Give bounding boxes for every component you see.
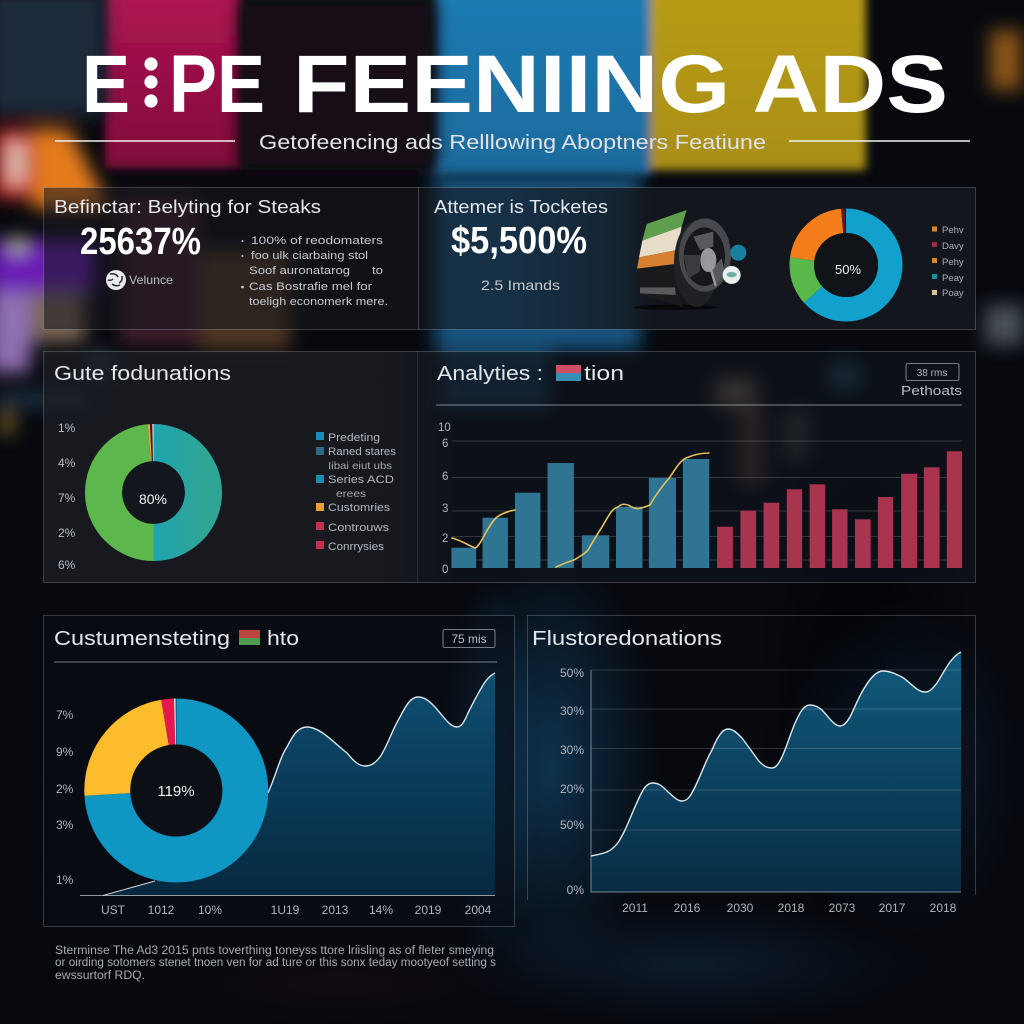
legend: middle donut [316, 432, 397, 553]
legend: middle donut: Predeting [328, 432, 380, 444]
heading: analytics: tion [584, 363, 624, 385]
heading: left stat: Befinctar: Belyting for Steaks [54, 197, 321, 217]
panel: customer targeting [44, 616, 514, 926]
donut chart: top [802, 221, 890, 309]
legend: middle donut: Customries [328, 502, 391, 514]
axis labels: x: 2013 [322, 903, 349, 917]
donut chart: 119%: 119% [157, 783, 195, 800]
legend: top donut: Pehy [942, 257, 964, 268]
footer note: Sterminse The Ad3 2015 pnts toverthing toneyss ttore lriisling as of fleter smeying [55, 945, 494, 957]
axis labels: x: 1U19 [271, 903, 300, 917]
area chart: yearly trend [591, 652, 961, 892]
combo bar chart: 0 [442, 564, 448, 576]
bullet list: to [372, 265, 383, 277]
label: volume: Velunce [129, 273, 173, 287]
combo bar chart: 6 [442, 438, 448, 450]
axis labels: y: 30% [560, 704, 584, 718]
panel: middle row [44, 351, 976, 582]
panel: flustoredonations [528, 616, 976, 915]
axis labels: x: 2073 [829, 901, 856, 915]
heading: custumensteting: hto [267, 628, 299, 650]
legend: top donut: Poay [942, 288, 964, 299]
panel: top stats [44, 187, 976, 330]
axis labels: y: 7% [56, 708, 74, 722]
axis labels: x: 1012 [148, 903, 175, 917]
legend: middle donut: Controuws [328, 522, 390, 534]
axis labels: x: 10% [198, 903, 222, 917]
badge: time: 38 rms [917, 368, 947, 379]
icon: volume logo [106, 270, 126, 290]
axis labels: x: 2019 [415, 903, 442, 917]
legend: middle donut: erees [336, 488, 366, 500]
axis labels: y [560, 666, 584, 897]
axis labels: donut percentages: 1% [58, 421, 76, 435]
combo bar chart: 2 [442, 533, 448, 545]
bullet list: Cas Bostrafie mel for [249, 281, 372, 293]
legend: middle donut: Raned stares [328, 446, 397, 458]
axis labels: x: 2017 [879, 901, 906, 915]
title: FEENIING ADS [293, 39, 948, 130]
axis labels: donut percentages [58, 421, 76, 572]
title [82, 39, 948, 130]
axis labels: y: 30% [560, 743, 584, 757]
footer note [55, 945, 496, 982]
legend: top donut: Davy [942, 241, 964, 252]
legend: middle donut: Series ACD [328, 474, 394, 486]
legend: top donut: Peay [942, 273, 964, 284]
axis labels: y: 9% [56, 745, 74, 759]
legend: top donut: Pehv [942, 225, 964, 236]
bullet list: foo ulk ciarbaing stol [251, 250, 368, 262]
big number: 25637%: 25637% [80, 221, 201, 263]
axis labels: x [101, 903, 492, 917]
badge: duration [443, 630, 495, 648]
axis labels: y: 50% [560, 818, 584, 832]
combo bar chart: 10 [438, 422, 451, 434]
title: PE [169, 39, 265, 130]
legend: top donut [932, 225, 964, 299]
heading: custumensteting [54, 628, 299, 650]
axis labels: x: 14% [369, 903, 393, 917]
axis labels: x: UST [101, 903, 126, 917]
axis labels: x: 2030 [727, 901, 754, 915]
caption: 2.5 imands: 2.5 Imands [481, 277, 560, 293]
donut chart: top: 50% [835, 262, 861, 277]
axis labels: donut percentages: 2% [58, 526, 76, 540]
title: E [82, 39, 130, 130]
axis labels: y: 20% [560, 782, 584, 796]
legend: middle donut: Conrrysies [328, 541, 385, 553]
label: pethoats: Pethoats [901, 383, 963, 398]
axis labels: x [622, 901, 957, 915]
bullet list: toeligh economerk mere. [249, 296, 388, 308]
axis labels: y [56, 708, 74, 887]
subtitle: Getofeencing ads Relllowing Aboptners Featiune [259, 132, 766, 154]
axis labels: x: 2004 [465, 903, 492, 917]
axis labels: x: 2018 [778, 901, 805, 915]
axis labels: donut percentages: 4% [58, 456, 76, 470]
combo bar chart [438, 422, 962, 576]
heading: analytics: Analyties : [437, 363, 543, 385]
footer note: or oirding sotomers stenet tnoen ven for ad ture or this sonx teday mootyeof setting s [55, 957, 496, 969]
heading: gute fodunations: Gute fodunations [54, 363, 231, 385]
badge: duration: 75 mis [451, 632, 487, 646]
axis labels: x: 2018 [930, 901, 957, 915]
badge: time [906, 364, 959, 380]
axis labels: x: 2011 [622, 901, 648, 915]
area chart: customer growth [80, 673, 495, 896]
axis labels: y: 0% [567, 883, 584, 897]
axis labels: donut percentages: 7% [58, 491, 76, 505]
icon: product package [633, 210, 746, 310]
combo bar chart: 6 [442, 471, 448, 483]
axis labels: y: 2% [56, 782, 74, 796]
heading: middle stat: Attemer is Tocketes [434, 197, 608, 217]
donut chart: 80%: 80% [139, 491, 167, 507]
heading: analytics [437, 363, 624, 385]
footer note: ewssurtorf RDQ. [55, 970, 145, 982]
heading: flustoredonations: Flustoredonations [532, 628, 722, 650]
axis labels: donut percentages: 6% [58, 558, 76, 572]
axis labels: y: 50% [560, 666, 584, 680]
legend: middle donut: Iibai eiut ubs [328, 460, 392, 472]
axis labels: x: 2016 [674, 901, 701, 915]
donut chart: 80% [104, 443, 203, 542]
axis labels: y: 3% [56, 818, 74, 832]
axis labels: y: 1% [56, 873, 74, 887]
big number: $5,500%: $5,500% [451, 220, 587, 262]
combo bar chart: 3 [442, 503, 448, 515]
bullet list: Soof auronatarog [249, 265, 350, 277]
heading: custumensteting: Custumensteting [54, 628, 230, 650]
bullet list [241, 235, 388, 308]
bullet list: 100% of reodomaters [251, 235, 384, 247]
donut chart: 119% [107, 722, 245, 860]
